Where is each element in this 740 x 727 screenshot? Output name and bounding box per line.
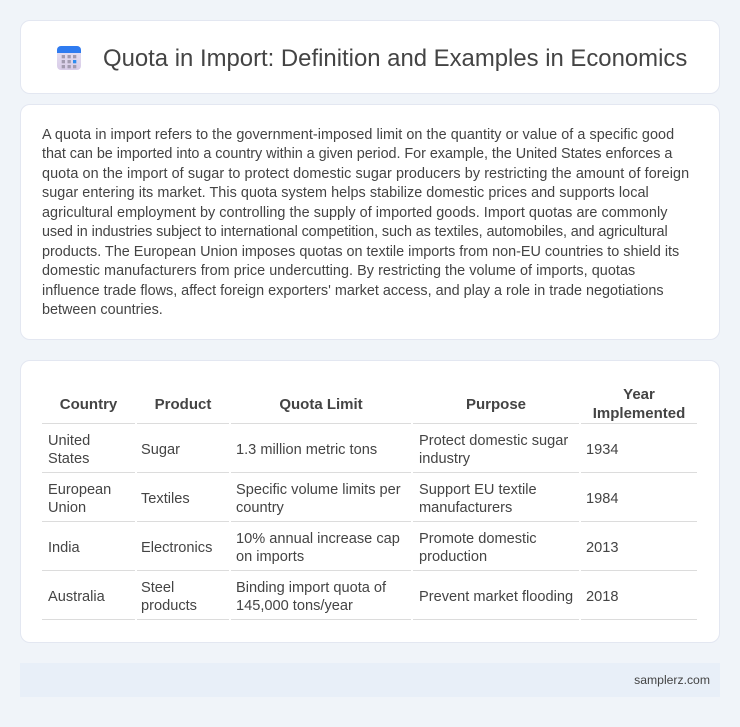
table of import quotas: Implemented: [593, 405, 685, 422]
table of import quotas: Support EU textile: [419, 482, 537, 498]
table of import quotas: Country: [60, 396, 117, 412]
panel: definition text: domestic manufacturers from price undercutting. By restricting the volume of imports, quotas: [42, 263, 635, 279]
table of import quotas: India: [48, 540, 80, 556]
table of import quotas: Protect domestic sugar: [419, 432, 568, 448]
table of import quotas: Australia: [48, 588, 105, 604]
table of import quotas: Quota Limit: [279, 396, 363, 412]
table of import quotas: production: [419, 548, 487, 564]
footer bar: [20, 663, 720, 697]
table of import quotas: Sugar: [141, 442, 180, 458]
table of import quotas: 1.3 million metric tons: [236, 442, 377, 458]
table of import quotas: 145,000 tons/year: [236, 598, 353, 614]
table of import quotas: country: [236, 500, 284, 516]
table of import quotas: United: [48, 432, 90, 448]
panel: definition text: influence trade flows, affect foreign exporters' market access, and play a role in trade negotiations: [42, 282, 664, 298]
table of import quotas: States: [48, 450, 89, 466]
table of import quotas: 1934: [586, 442, 618, 458]
header panel: [20, 20, 720, 94]
table of import quotas: 2018: [586, 588, 618, 604]
panel: definition text: [20, 104, 720, 340]
table of import quotas: Specific volume limits per: [236, 482, 401, 498]
title: Quota in Import: Definition and Examples in Economics: [103, 45, 687, 72]
table of import quotas: manufacturers: [419, 500, 512, 516]
table of import quotas: on imports: [236, 548, 304, 564]
table of import quotas: 2013: [586, 540, 618, 556]
panel: definition text: A quota in import refers to the government-imposed limit on the quantity or value of a specific good: [42, 126, 674, 142]
panel: definition text: between countries.: [42, 302, 163, 318]
panel: definition text: products. The European Union imposes quotas on textile imports from non-EU countries to shield its: [42, 244, 679, 260]
table of import quotas: Union: [48, 500, 86, 516]
panel: definition text: agricultural employment by controlling the supply of imported goods. Import quotas are commonly: [42, 204, 667, 220]
table of import quotas: Promote domestic: [419, 530, 537, 546]
table of import quotas: Year: [623, 386, 655, 403]
table of import quotas: industry: [419, 450, 470, 466]
table of import quotas: Textiles: [141, 490, 190, 506]
icon: calendar: [57, 46, 81, 70]
panel: definition text: quota on the import of sugar to protect domestic sugar producers by restricting the amount of foreign: [42, 166, 689, 182]
table of import quotas: 1984: [586, 490, 618, 506]
table of import quotas: Prevent market flooding: [419, 588, 573, 604]
table of import quotas: 10% annual increase cap: [236, 530, 400, 546]
footer source text: samplerz.com: [634, 673, 710, 687]
table of import quotas: Binding import quota of: [236, 580, 386, 596]
table of import quotas: Electronics: [141, 540, 212, 556]
table of import quotas: products: [141, 598, 197, 614]
table of import quotas: Steel: [141, 580, 174, 596]
table of import quotas: European: [48, 482, 111, 498]
table of import quotas: Product: [155, 396, 211, 412]
panel: definition text: sugar entering its market. This quota system helps stabilize domestic prices and supports local: [42, 185, 649, 201]
table of import quotas: Purpose: [466, 396, 526, 412]
table of import quotas: [42, 386, 697, 620]
panel: quota table: [20, 360, 720, 643]
panel: definition text: used in industries subject to international competition, such as textiles, automobiles, and agricultural: [42, 224, 668, 240]
panel: definition text: that can be imported into a country within a given period. For example, the United States enforces a: [42, 146, 672, 162]
